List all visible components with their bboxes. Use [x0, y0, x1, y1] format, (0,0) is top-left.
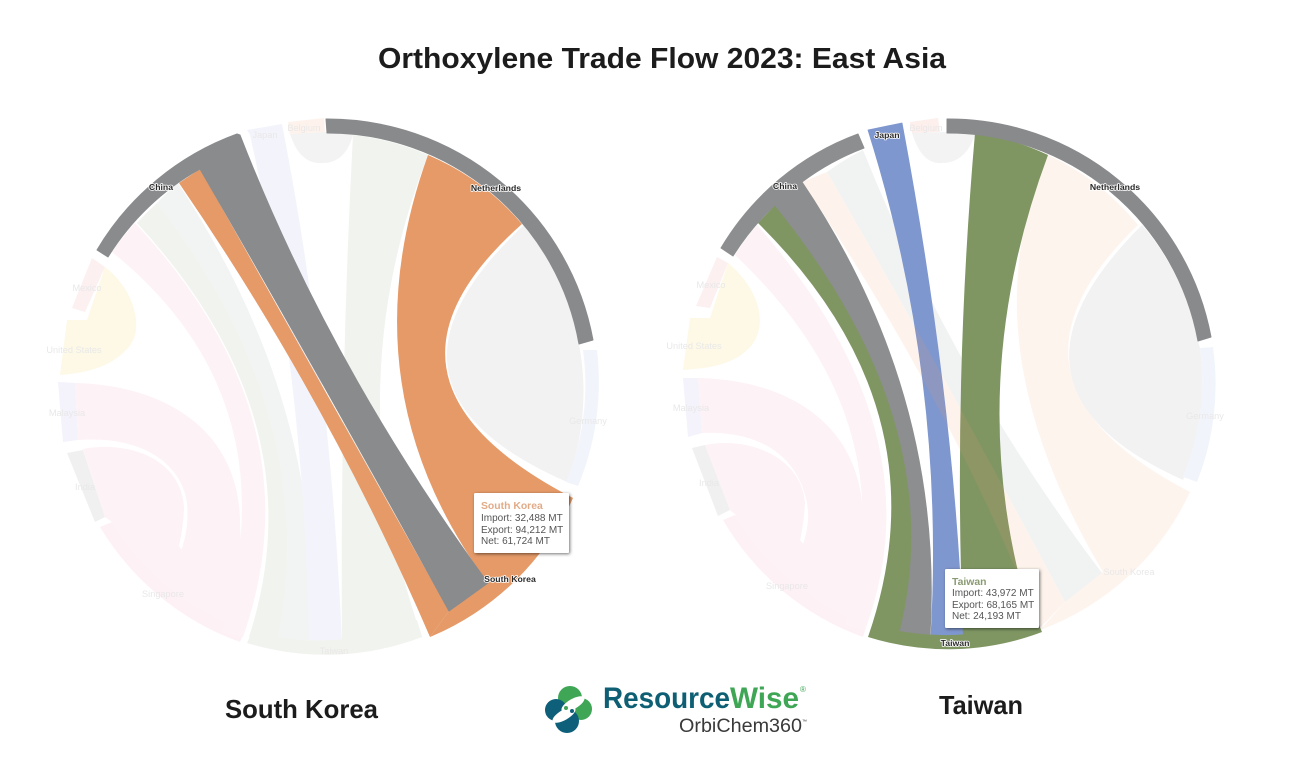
country labels: Mexico	[696, 280, 726, 290]
country labels: Singapore	[766, 581, 808, 591]
country labels: Germany	[569, 416, 607, 426]
country labels: Belgium	[909, 123, 943, 133]
ribbon: South Korea and China orange	[179, 169, 449, 637]
country labels: China	[773, 181, 797, 191]
faded overlay: crossing ribbons	[915, 328, 1017, 569]
title: Orthoxylene Trade Flow 2023: East Asia	[378, 43, 947, 75]
tooltip: South Korea: South Korea	[481, 501, 543, 512]
arc: Netherlands grey	[326, 119, 593, 344]
tooltip: South Korea: Net: 61,724 MT	[481, 536, 550, 547]
logo: ResourceWise OrbiChem360: OrbiChem360	[679, 715, 802, 737]
country labels: Netherlands	[1090, 182, 1140, 192]
tooltip: South Korea: Import: 32,488 MT	[481, 513, 563, 524]
logo: ResourceWise OrbiChem360: Wise	[730, 682, 799, 715]
caption: Taiwan: Taiwan	[939, 690, 1023, 720]
country labels: South Korea	[1103, 567, 1155, 577]
logo: ResourceWise OrbiChem360: ®	[800, 685, 806, 694]
country labels: India	[699, 478, 720, 488]
country labels: China	[149, 182, 173, 192]
ribbon: Japan blue	[868, 123, 963, 637]
country labels: Belgium	[287, 123, 321, 133]
tooltip: Taiwan: Net: 24,193 MT	[952, 611, 1021, 622]
tooltip: Taiwan: Export: 68,165 MT	[952, 600, 1034, 611]
faded ribbons and bands: other countries	[683, 118, 1216, 637]
tooltip: Taiwan: Taiwan	[952, 577, 986, 588]
country labels: South Korea	[484, 574, 536, 584]
arc: Taiwan green	[868, 618, 1042, 649]
country labels: Malaysia	[673, 403, 710, 413]
arc: Netherlands grey	[947, 119, 1211, 341]
country labels: Taiwan	[320, 646, 348, 656]
country labels	[666, 123, 1224, 648]
country labels: Japan	[252, 130, 278, 140]
tooltip: Taiwan	[945, 569, 1039, 628]
country labels: India	[75, 482, 96, 492]
logo: ResourceWise OrbiChem360	[545, 682, 807, 737]
chord chart: South Korea	[46, 118, 607, 656]
ribbon: Taiwan and Netherlands green	[960, 133, 1048, 637]
icon: swirl mark	[545, 686, 592, 733]
arc and ribbon: China grey	[721, 134, 931, 635]
country labels: United States	[666, 341, 722, 351]
country labels: Germany	[1186, 411, 1224, 421]
country labels: Singapore	[142, 589, 184, 599]
tooltip: South Korea: Export: 94,212 MT	[481, 525, 563, 536]
ribbon: South Korea and Netherlands orange	[397, 155, 573, 637]
country labels: Japan	[874, 130, 900, 140]
faded ribbons and bands: other countries	[58, 118, 599, 655]
logo: ResourceWise OrbiChem360: ™	[802, 719, 807, 725]
country labels: Malaysia	[49, 408, 86, 418]
ribbon: Taiwan and China green	[758, 205, 912, 637]
country labels: Netherlands	[471, 183, 521, 193]
country labels: Mexico	[72, 283, 102, 293]
tooltip: South Korea	[474, 493, 569, 553]
arc and ribbon: China grey	[97, 134, 488, 611]
country labels	[46, 123, 607, 656]
country labels: United States	[46, 345, 102, 355]
tooltip: Taiwan: Import: 43,972 MT	[952, 588, 1034, 599]
caption: South Korea: South Korea	[225, 694, 379, 724]
wordmark: Resource	[603, 682, 730, 715]
country labels: Taiwan	[941, 638, 969, 648]
chord chart: Taiwan	[666, 118, 1224, 649]
